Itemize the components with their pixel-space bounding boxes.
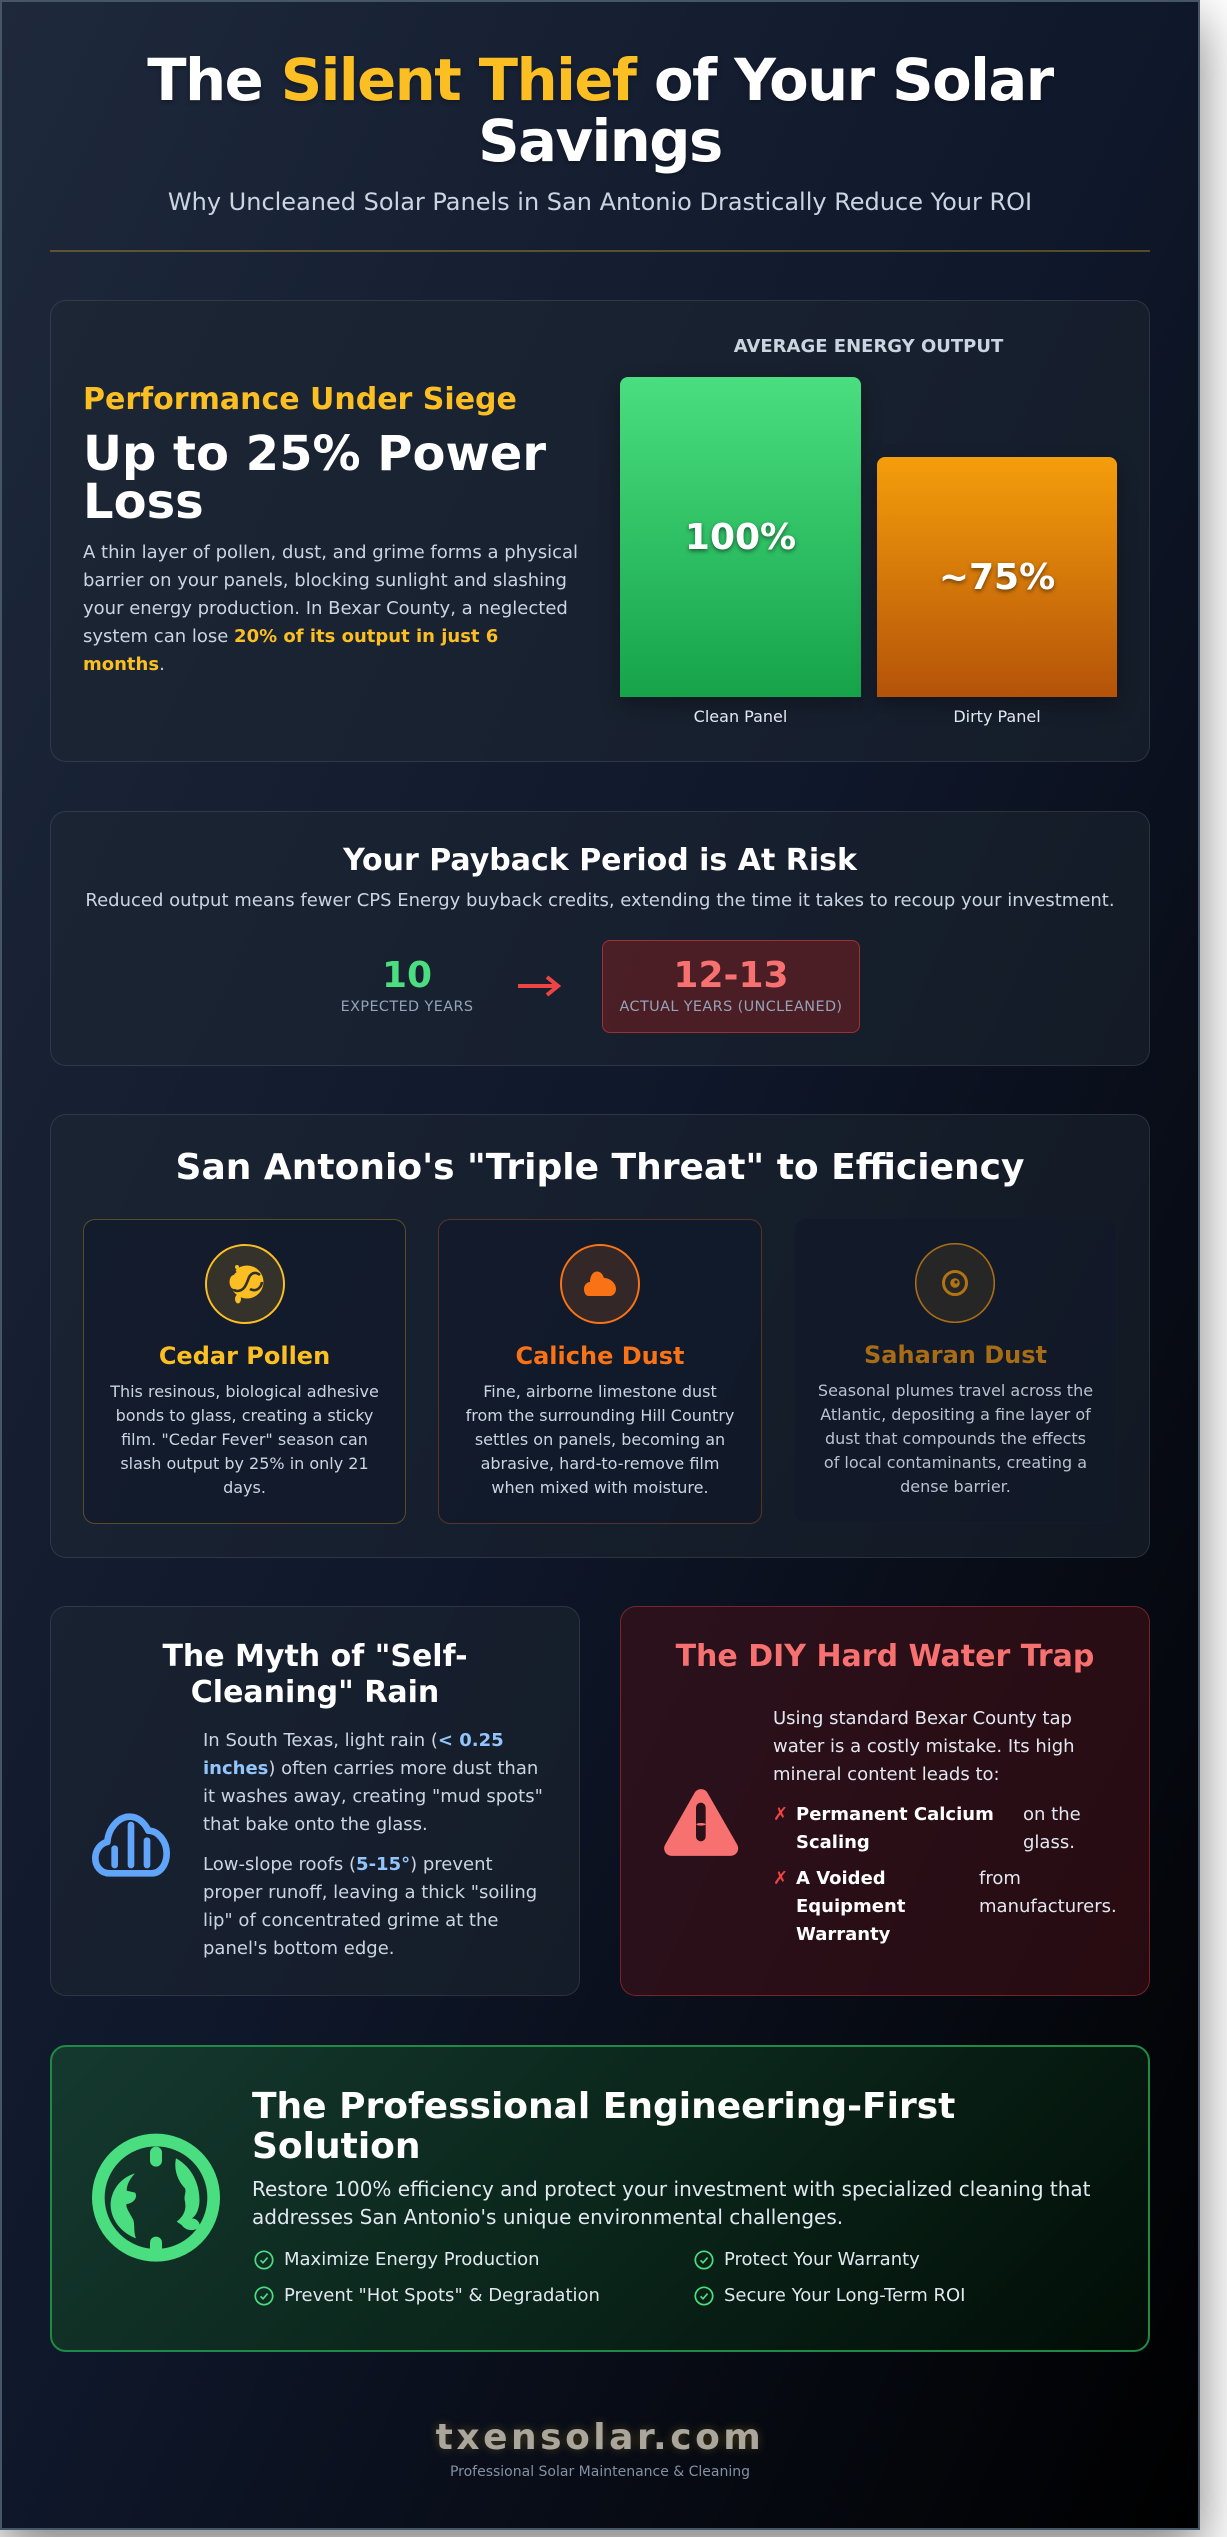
bar: clean panel: 100% bbox=[685, 517, 796, 558]
performance eyebrow: Performance Under Siege bbox=[83, 382, 517, 417]
saharan text: dense barrier. bbox=[900, 1477, 1011, 1496]
DIY text: mineral content leads to: bbox=[773, 1764, 1000, 1785]
myth text: inches) often carries more dust than bbox=[203, 1758, 538, 1779]
panel: performance bbox=[50, 300, 1150, 762]
DIY text bbox=[773, 1708, 1075, 1785]
cedar text: days. bbox=[223, 1478, 266, 1497]
stat: actual years: 12-13 bbox=[673, 955, 789, 996]
DIY heading: The DIY Hard Water Trap bbox=[676, 1639, 1094, 1674]
list item: calcium scaling: Scaling bbox=[796, 1832, 870, 1853]
myth text: panel's bottom edge. bbox=[203, 1938, 395, 1959]
list item: calcium scaling: ✗ bbox=[773, 1804, 788, 1825]
solution text: Restore 100% efficiency and protect your investment with specialized cleaning that bbox=[252, 2177, 1090, 2201]
icon: warning triangle bbox=[664, 1789, 738, 1856]
panel: professional solution bbox=[50, 2045, 1150, 2352]
icon: swirl bbox=[915, 1243, 995, 1323]
solution text: addresses San Antonio's unique environmental challenges. bbox=[252, 2205, 843, 2229]
stat: expected years bbox=[341, 955, 473, 1015]
myth text: lip" of concentrated grime at the bbox=[203, 1910, 498, 1931]
list item: calcium scaling: on the bbox=[1023, 1804, 1081, 1825]
list item: voided warranty: Equipment bbox=[796, 1896, 905, 1917]
solution heading bbox=[252, 2086, 955, 2167]
card: cedar pollen bbox=[83, 1219, 406, 1524]
card: caliche dust bbox=[438, 1219, 762, 1524]
cedar text bbox=[110, 1382, 379, 1497]
triple threat heading: San Antonio's "Triple Threat" to Efficiency bbox=[176, 1147, 1024, 1188]
payback heading: Your Payback Period is At Risk bbox=[343, 843, 857, 878]
cedar text: film. "Cedar Fever" season can bbox=[121, 1430, 368, 1449]
list item: voided warranty: A Voided bbox=[796, 1868, 886, 1889]
subtitle: Why Uncleaned Solar Panels in San Antonio Drastically Reduce Your ROI bbox=[168, 188, 1032, 216]
caliche text: from the surrounding Hill Country bbox=[466, 1406, 734, 1425]
saharan text: Seasonal plumes travel across the bbox=[818, 1381, 1093, 1400]
bar: dirty panel bbox=[877, 457, 1117, 697]
arrow bbox=[518, 976, 562, 996]
chart title: AVERAGE ENERGY OUTPUT bbox=[734, 336, 1003, 357]
list item: voided warranty: Warranty bbox=[796, 1924, 890, 1945]
solution heading: Solution bbox=[252, 2126, 421, 2167]
title: The Silent Thief of Your Solar bbox=[147, 47, 1053, 114]
stat: actual years bbox=[602, 940, 860, 1033]
DIY text: water is a costly mistake. Its high bbox=[773, 1736, 1075, 1757]
list item: calcium scaling: glass. bbox=[1023, 1832, 1075, 1853]
bar: clean panel bbox=[620, 377, 861, 697]
DIY text: Using standard Bexar County tap bbox=[773, 1708, 1072, 1729]
performance heading: Loss bbox=[83, 474, 204, 530]
panel: triple threat bbox=[50, 1114, 1150, 1558]
performance heading: Up to 25% Power bbox=[83, 426, 546, 482]
panel: self-cleaning rain myth bbox=[50, 1606, 580, 1996]
saharan text bbox=[818, 1381, 1093, 1496]
label: dirty panel: Dirty Panel bbox=[953, 707, 1041, 726]
panel: payback bbox=[50, 811, 1150, 1066]
myth text bbox=[203, 1730, 543, 1959]
performance text: system can lose 20% of its output in just 6 bbox=[83, 626, 498, 647]
performance text bbox=[83, 542, 578, 675]
myth text: proper runoff, leaving a thick "soiling bbox=[203, 1882, 537, 1903]
payback text: Reduced output means fewer CPS Energy buyback credits, extending the time it takes to recoup your investment. bbox=[85, 890, 1115, 911]
caliche text: Fine, airborne limestone dust bbox=[483, 1382, 717, 1401]
benefit: energy production: Maximize Energy Production bbox=[284, 2249, 540, 2270]
cedar heading: Cedar Pollen bbox=[159, 1342, 330, 1370]
performance text: barrier on your panels, blocking sunlight and slashing bbox=[83, 570, 567, 591]
footer tagline: Professional Solar Maintenance & Cleaning bbox=[450, 2464, 750, 2480]
stat: expected years: 10 bbox=[382, 955, 432, 996]
saharan text: Atlantic, depositing a fine layer of bbox=[820, 1405, 1091, 1424]
title: Savings bbox=[478, 108, 722, 175]
icon: cloud bbox=[560, 1244, 640, 1324]
solution heading: The Professional Engineering-First bbox=[252, 2086, 955, 2127]
label: clean panel: Clean Panel bbox=[694, 707, 787, 726]
cedar text: This resinous, biological adhesive bbox=[110, 1382, 379, 1401]
caliche text: settles on panels, becoming an bbox=[475, 1430, 725, 1449]
performance text: your energy production. In Bexar County, a neglected bbox=[83, 598, 568, 619]
myth text: In South Texas, light rain (< 0.25 bbox=[203, 1730, 504, 1751]
solution text bbox=[252, 2177, 1090, 2229]
myth heading: Cleaning" Rain bbox=[191, 1675, 439, 1710]
caliche text: abrasive, hard-to-remove film bbox=[481, 1454, 719, 1473]
title bbox=[147, 47, 1054, 175]
benefit: hot spots: Prevent "Hot Spots" & Degradation bbox=[284, 2285, 600, 2306]
performance heading bbox=[83, 426, 546, 530]
bar: dirty panel: ~75% bbox=[939, 557, 1055, 598]
stat: actual years: ACTUAL YEARS (UNCLEANED) bbox=[620, 999, 842, 1015]
list item: voided warranty bbox=[773, 1868, 1117, 1945]
cedar text: slash output by 25% in only 21 bbox=[120, 1454, 369, 1473]
stat: expected years: EXPECTED YEARS bbox=[341, 999, 473, 1015]
saharan heading: Saharan Dust bbox=[864, 1341, 1047, 1369]
caliche text bbox=[466, 1382, 734, 1497]
myth text: that bake onto the glass. Low-slope roofs (5-15°) prevent bbox=[203, 1814, 493, 1875]
myth heading: The Myth of "Self- bbox=[162, 1639, 468, 1674]
list item: calcium scaling: Permanent Calcium bbox=[796, 1804, 994, 1825]
saharan text: of local contaminants, creating a bbox=[824, 1453, 1087, 1472]
performance text: months. bbox=[83, 654, 165, 675]
icon: rain cloud bbox=[92, 1813, 170, 1877]
panel: DIY hard water trap bbox=[620, 1606, 1150, 1996]
card: saharan dust bbox=[794, 1218, 1117, 1523]
benefit: ROI: Secure Your Long-Term ROI bbox=[724, 2285, 966, 2306]
myth text: it washes away, creating "mud spots" bbox=[203, 1786, 543, 1807]
list item: voided warranty: from bbox=[979, 1868, 1021, 1889]
caliche text: when mixed with moisture. bbox=[491, 1478, 709, 1497]
caliche heading: Caliche Dust bbox=[516, 1342, 684, 1370]
footer brand: txensolar.com bbox=[436, 2417, 764, 2458]
performance text: A thin layer of pollen, dust, and grime forms a physical bbox=[83, 542, 578, 563]
icon: solar gear bbox=[92, 2134, 220, 2262]
cedar text: bonds to glass, creating a sticky bbox=[116, 1406, 373, 1425]
myth heading bbox=[162, 1639, 468, 1710]
list item: calcium scaling bbox=[773, 1804, 1081, 1853]
icon: pollen bbox=[205, 1244, 285, 1324]
benefit: warranty: Protect Your Warranty bbox=[724, 2249, 920, 2270]
list item: voided warranty: manufacturers. bbox=[979, 1896, 1117, 1917]
saharan text: dust that compounds the effects bbox=[825, 1429, 1086, 1448]
list item: voided warranty: ✗ bbox=[773, 1868, 788, 1889]
